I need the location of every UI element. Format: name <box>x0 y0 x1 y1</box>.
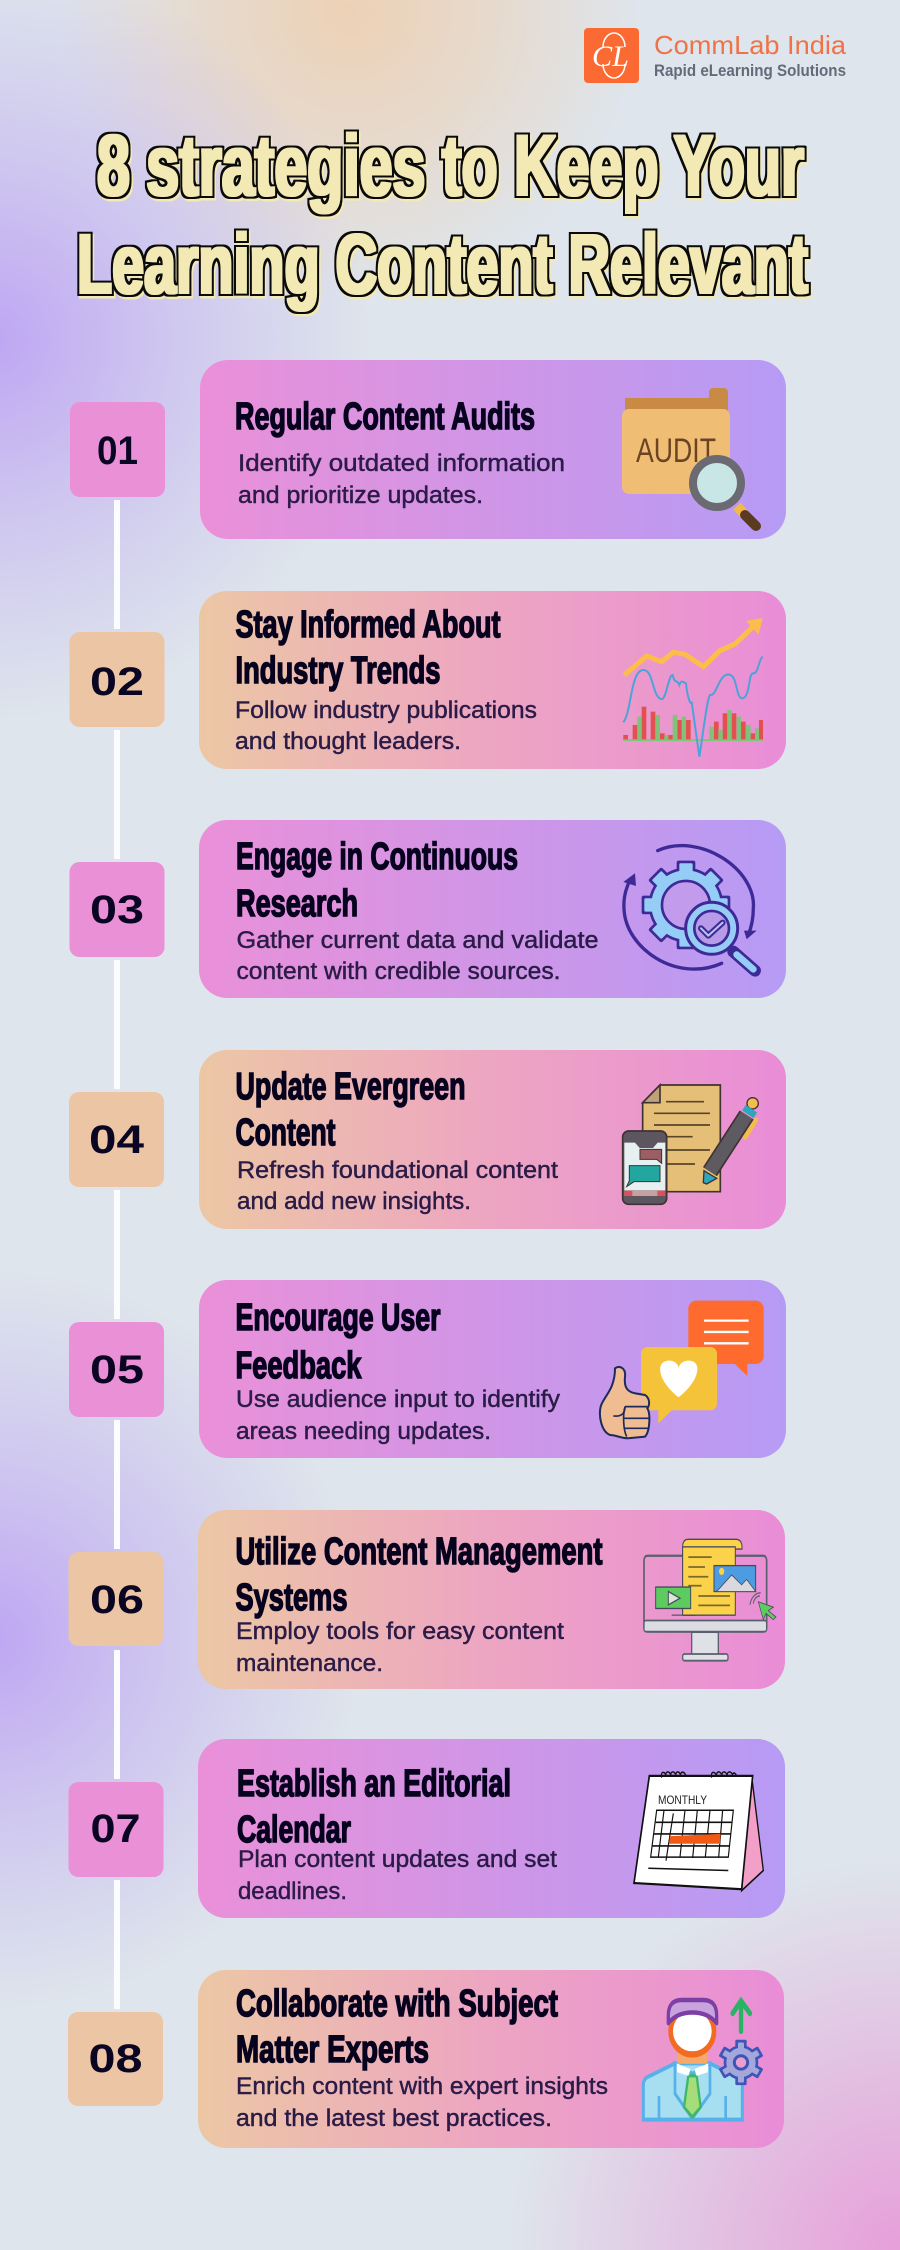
card 04 <box>199 1050 786 1229</box>
heading 04: Content <box>236 1112 336 1154</box>
heading 07: Establish an Editorial <box>237 1763 511 1805</box>
badge 05 <box>69 1322 164 1417</box>
badge 03 <box>70 862 164 957</box>
description 03: Gather current data and validate <box>236 927 598 954</box>
step 07 <box>68 1739 785 1918</box>
step 02 <box>70 591 786 769</box>
description 08 <box>236 2073 608 2132</box>
heading 08: Matter Experts <box>236 2029 429 2071</box>
step 01 <box>70 360 786 539</box>
description 02 <box>235 697 537 755</box>
description 05: Use audience input to identify <box>236 1386 560 1413</box>
step 05 <box>69 1280 786 1458</box>
card 07 <box>198 1739 785 1918</box>
description 07 <box>238 1846 557 1905</box>
description 04: Refresh foundational content <box>237 1157 558 1184</box>
description 01 <box>238 450 565 509</box>
heading 06 <box>236 1531 603 1619</box>
badge 05: 05 <box>90 1348 144 1392</box>
heading 02 <box>236 604 501 692</box>
icon: trend chart <box>623 618 763 757</box>
card 08 <box>198 1970 784 2148</box>
card 06 <box>198 1510 785 1689</box>
heading 06: Systems <box>236 1577 348 1619</box>
logo tagline: Rapid eLearning Solutions <box>654 62 846 80</box>
badge 08 <box>68 2012 163 2106</box>
card 03 <box>199 820 786 998</box>
badge 04: 04 <box>89 1118 145 1162</box>
description 01: Identify outdated information <box>238 450 565 477</box>
icon: audit folder: AUDIT <box>636 432 716 470</box>
heading 08: Collaborate with Subject <box>236 1983 558 2025</box>
description 05: areas needing updates. <box>236 1418 491 1445</box>
badge 01 <box>70 402 165 497</box>
description 07: Plan content updates and set <box>238 1846 557 1873</box>
timeline connector <box>114 500 120 2009</box>
heading 05: Feedback <box>236 1345 362 1387</box>
heading 08 <box>236 1983 558 2071</box>
badge 06: 06 <box>90 1578 144 1622</box>
badge 07 <box>68 1782 164 1877</box>
heading 03: Engage in Continuous <box>236 836 518 878</box>
heading 07: Calendar <box>237 1809 351 1851</box>
heading 03 <box>236 836 518 925</box>
step 06 <box>68 1510 785 1689</box>
description 07: deadlines. <box>238 1878 347 1905</box>
description 08: and the latest best practices. <box>236 2105 552 2132</box>
icon: content management monitor <box>644 1539 776 1661</box>
description 08: Enrich content with expert insights <box>236 2073 608 2100</box>
heading 04 <box>236 1066 466 1154</box>
icon: subject matter expert <box>643 2000 763 2120</box>
step 04 <box>69 1050 786 1229</box>
description 04: and add new insights. <box>237 1188 471 1215</box>
badge 06 <box>68 1552 164 1646</box>
logo name: CommLab India <box>654 30 847 60</box>
icon: feedback bubbles and thumbs up <box>600 1301 764 1438</box>
icon: research gear and magnifier <box>623 846 757 971</box>
description 04 <box>237 1157 558 1215</box>
badge 01: 01 <box>97 429 138 473</box>
heading 05: Encourage User <box>236 1297 441 1339</box>
icon: document, phone and pen <box>623 1085 758 1204</box>
icon: desk calendar: MONTHLY <box>658 1793 707 1807</box>
description 05 <box>236 1386 560 1445</box>
card 02 <box>199 591 786 769</box>
step 08 <box>68 1970 784 2148</box>
description 01: and prioritize updates. <box>238 482 483 509</box>
heading 04: Update Evergreen <box>236 1066 466 1108</box>
logo mark: CL <box>592 40 629 73</box>
description 02: Follow industry publications <box>235 697 537 724</box>
icon: desk calendar <box>634 1772 763 1891</box>
description 06: Employ tools for easy content <box>236 1618 564 1645</box>
badge 02 <box>70 632 164 727</box>
badge 04 <box>69 1092 164 1187</box>
heading 05 <box>236 1297 441 1387</box>
title <box>77 118 808 311</box>
heading 06: Utilize Content Management <box>236 1531 603 1573</box>
logo mark <box>584 28 639 83</box>
logo: CommLab India <box>584 28 847 83</box>
badge 08: 08 <box>88 2037 142 2081</box>
heading 02: Industry Trends <box>236 650 440 692</box>
description 02: and thought leaders. <box>235 728 461 755</box>
badge 07: 07 <box>90 1807 140 1851</box>
step 03 <box>70 820 786 998</box>
description 06: maintenance. <box>236 1650 383 1677</box>
heading 02: Stay Informed About <box>236 604 501 646</box>
badge 03: 03 <box>90 888 144 932</box>
description 03 <box>236 927 598 985</box>
card 05 <box>199 1280 786 1458</box>
description 03: content with credible sources. <box>236 958 560 985</box>
card 01 <box>200 360 786 539</box>
heading 01: Regular Content Audits <box>235 396 535 438</box>
heading 07 <box>237 1763 511 1851</box>
icon: audit folder <box>622 388 756 526</box>
description 06 <box>236 1618 564 1677</box>
heading 03: Research <box>236 883 358 925</box>
badge 02: 02 <box>90 660 144 704</box>
